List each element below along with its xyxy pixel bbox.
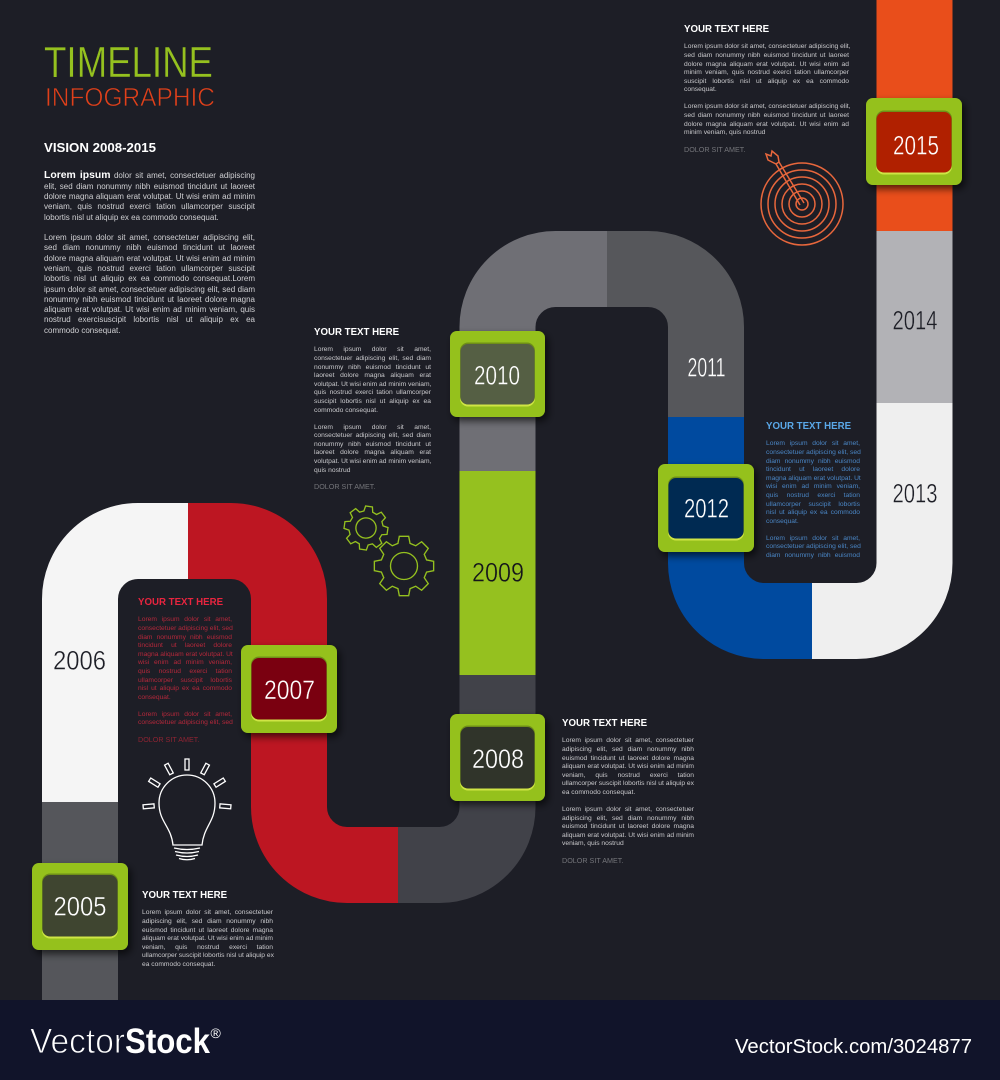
text block 2012: tincidunt ut laoreet dolore <box>766 466 860 473</box>
text block 2015: YOUR TEXT HERE <box>684 24 769 35</box>
segment 2009 <box>460 471 536 675</box>
text block 2008 <box>562 718 694 865</box>
text block 2005: ullamcorper suscipit lobortis nisl ut aliquip ex <box>142 952 274 959</box>
text block 2007: consequat. <box>138 694 171 701</box>
text block 2012: nisl ut aliquip ex ea commodo <box>766 509 860 516</box>
logo: registered mark: ® <box>210 1025 222 1041</box>
text block 2015: sed diam nonummy nibh euismod tincidunt ut laoreet <box>684 52 849 59</box>
text block 2010: DOLOR SIT AMET. <box>314 482 375 491</box>
text block 2007: wisi enim ad minim veniam, <box>138 659 232 666</box>
text block 2007 <box>138 597 233 744</box>
segment 2013 <box>812 403 914 621</box>
road year labels <box>53 306 938 676</box>
text block 2005: YOUR TEXT HERE <box>142 890 227 901</box>
text block 2012: wisi enim ad minim veniam, <box>766 483 860 490</box>
segment 2007 <box>188 541 398 865</box>
subtitle: VISION 2008-2015 <box>44 141 156 155</box>
intro text block: lobortis nisl ut aliquip ex ea commodo consequat.Lorem <box>44 274 255 283</box>
text block 2012: YOUR TEXT HERE <box>766 421 851 432</box>
text block 2015: minim veniam, quis nostrud <box>684 129 765 136</box>
text block 2007: nisl ut aliquip ex ea commodo <box>138 685 232 692</box>
segment 2008 <box>398 675 498 865</box>
intro text block <box>44 170 255 335</box>
text block 2010: nonummy nibh euismod tincidunt ut <box>314 364 431 371</box>
text block 2010: quis nostrud exerci tation ullamcorper <box>314 389 431 396</box>
text block 2005: Lorem ipsum dolor sit amet, consectetuer <box>142 909 273 916</box>
text block 2008: Lorem ipsum dolor sit amet, consectetuer <box>562 806 694 813</box>
segment 2015 <box>876 0 952 231</box>
text block 2005: veniam, quis nostrud exerci tation <box>142 944 273 951</box>
text block 2015: dolore magna aliquam erat volutpat. Ut wisi enim ad <box>684 61 849 68</box>
segment 2012 <box>706 417 812 621</box>
text block 2008: aliquam erat volutpat. Ut wisi enim ad minim <box>562 763 694 770</box>
year 2006: 2006 <box>53 646 106 676</box>
title line: timeline: TIMELINE <box>44 38 213 87</box>
text block 2012: quis nostrud exerci tation <box>766 492 860 499</box>
text block 2008: adipiscing elit, sed diam nonummy nibh <box>562 815 694 822</box>
year 2014: 2014 <box>892 306 938 336</box>
text block 2012: ullamcorper suscipit lobortis <box>766 501 860 508</box>
segment 2006 <box>80 541 188 802</box>
intro text block: nostrud exercisuscipit lobortis nisl ut aliquip ex ea <box>44 315 255 324</box>
text block 2015: minim veniam, quis nostrud exerci tation ullamcorper <box>684 69 849 76</box>
text block 2015: Lorem ipsum dolor sit amet, consectetuer adipiscing elit, <box>684 43 851 50</box>
text block 2015: consequat. <box>684 86 717 93</box>
text block 2012: consectetuer adipiscing elit, sed <box>766 449 861 456</box>
text block 2007: tincidunt ut laoreet dolore <box>138 642 232 649</box>
intro text block: sed diam nonummy nibh euismod tincidunt ut laoreet <box>44 243 255 252</box>
text block 2008: ea commodo consequat. <box>562 789 635 796</box>
text block 2012: magna aliquam erat volutpat. Ut <box>766 475 861 482</box>
badge 2008: 2008 <box>472 744 524 774</box>
intro text block: lobortis nisl ut aliquip ex ea commodo consequat. <box>44 213 219 222</box>
text block 2008: aliquam erat volutpat. Ut wisi enim ad minim <box>562 832 694 839</box>
icon: gears <box>341 503 434 596</box>
icon: light bulb <box>143 759 231 860</box>
segment 2011 <box>607 269 706 417</box>
text block 2010: suscipit lobortis nisl ut aliquip ex ea <box>314 398 431 405</box>
badge 2010 <box>450 331 545 417</box>
segment 2010 <box>498 269 607 471</box>
badge 2012 <box>658 464 754 552</box>
text block 2007: diam nonummy nibh euismod <box>138 634 232 641</box>
text block 2015: DOLOR SIT AMET. <box>684 145 745 154</box>
text block 2007: Lorem ipsum dolor sit amet, <box>138 616 232 623</box>
logo: vector: Vector <box>30 1022 125 1061</box>
text block 2010: Lorem ipsum dolor sit amet, <box>314 424 431 431</box>
text block 2012: Lorem ipsum dolor sit amet, <box>766 440 860 447</box>
footer url: VectorStock.com/3024877 <box>735 1036 972 1058</box>
logo: stock: Stock <box>125 1022 210 1061</box>
text block 2007: ullamcorper suscipit lobortis <box>138 677 232 684</box>
text block 2010: laoreet dolore magna aliquam erat <box>314 449 431 456</box>
badge 2005: 2005 <box>54 892 106 922</box>
intro text block: dolore magna aliquam erat volutpat. Ut wisi enim ad minim <box>44 192 255 201</box>
text block 2008: YOUR TEXT HERE <box>562 718 647 729</box>
intro text block: veniam, quis nostrud exerci tation ullamcorper suscipit <box>44 264 255 273</box>
intro text block: ipsum dolor sit amet, consectetuer adipiscing elit, sed diam <box>44 284 255 294</box>
text block 2010: Lorem ipsum dolor sit amet, <box>314 346 431 353</box>
badge 2012: 2012 <box>684 494 729 524</box>
title line: infographic: INFOGRAPHIC <box>45 82 215 112</box>
text block 2015: dolore magna aliquam erat volutpat. Ut wisi enim ad <box>684 121 849 128</box>
winding road <box>80 0 914 1000</box>
text block 2008: veniam, quis nostrud exerci tation <box>562 772 694 779</box>
segment 2014 <box>876 231 952 403</box>
year 2009: 2009 <box>472 558 524 588</box>
text block 2007: quis nostrud exerci tation <box>138 668 232 675</box>
intro text block: commodo consequat. <box>44 326 120 335</box>
text block 2005 <box>142 890 274 968</box>
text block 2010: laoreet dolore magna aliquam erat <box>314 372 431 379</box>
intro text block: elit, sed diam nonummy nibh euismod tincidunt ut laoreet <box>44 182 255 191</box>
text block 2015: sed diam nonummy nibh euismod tincidunt ut laoreet <box>684 112 849 119</box>
year 2011: 2011 <box>688 352 726 382</box>
text block 2007: magna aliquam erat volutpat. Ut <box>138 651 233 658</box>
text block 2010: volutpat. Ut wisi enim ad minim veniam, <box>314 381 431 388</box>
intro text block: dolore magna aliquam erat volutpat. Ut wisi enim ad minim <box>44 254 255 263</box>
text block 2012: diam nonummy nibh euismod <box>766 552 860 559</box>
badge 2007 <box>241 645 337 733</box>
intro text block: Lorem ipsum dolor sit amet, consectetuer adipiscing elit, <box>44 233 255 242</box>
footer band <box>0 1000 1000 1080</box>
text block 2015: Lorem ipsum dolor sit amet, consectetuer adipiscing elit, <box>684 103 851 110</box>
text block 2010: consectetuer adipiscing elit, sed diam <box>314 432 431 439</box>
text block 2008: euismod tincidunt ut laoreet dolore magna <box>562 755 694 762</box>
title <box>44 38 215 112</box>
text block 2015: suscipit lobortis nisl ut aliquip ex ea commodo <box>684 78 849 85</box>
intro text block: veniam, quis nostrud exerci tation ullamcorper suscipit <box>44 202 255 211</box>
text block 2007: consectetuer adipiscing elit, sed <box>138 625 233 632</box>
text block 2005: aliquam erat volutpat. Ut wisi enim ad minim <box>142 935 273 942</box>
intro text block: nonummy nibh euismod tincidunt ut laoreet dolore magna <box>44 295 255 304</box>
text block 2007: consectetuer adipiscing elit, sed <box>138 719 233 726</box>
text block 2010: nonummy nibh euismod tincidunt ut <box>314 441 431 448</box>
text block 2005: ea commodo consequat. <box>142 961 215 968</box>
text block 2010: quis nostrud <box>314 466 350 474</box>
footer logo <box>30 1022 222 1061</box>
segment 2005 <box>42 802 118 1000</box>
text block 2007: YOUR TEXT HERE <box>138 597 223 608</box>
text block 2012 <box>766 421 861 559</box>
text block 2005: euismod tincidunt ut laoreet dolore magna <box>142 927 273 934</box>
text block 2012: consectetuer adipiscing elit, sed <box>766 543 861 550</box>
text block 2012: consequat. <box>766 518 799 525</box>
badge 2007: 2007 <box>264 675 315 705</box>
text block 2008: DOLOR SIT AMET. <box>562 856 623 865</box>
text block 2008: veniam, quis nostrud <box>562 840 624 847</box>
text block 2008: Lorem ipsum dolor sit amet, consectetuer <box>562 737 694 744</box>
text block 2010: YOUR TEXT HERE <box>314 327 399 338</box>
text block 2008: adipiscing elit, sed diam nonummy nibh <box>562 746 694 753</box>
text block 2007: Lorem ipsum dolor sit amet, <box>138 711 232 718</box>
intro text block: aliquam erat volutpat. Ut wisi enim ad minim veniam, quis <box>44 305 255 314</box>
text block 2010: volutpat. Ut wisi enim ad minim veniam, <box>314 458 431 465</box>
text block 2007: DOLOR SIT AMET. <box>138 735 199 744</box>
text block 2012: Lorem ipsum dolor sit amet, <box>766 535 860 542</box>
year 2013: 2013 <box>892 478 938 508</box>
badge 2015 <box>866 98 962 185</box>
text block 2015 <box>684 24 851 154</box>
text block 2005: adipiscing elit, sed diam nonummy nibh <box>142 918 273 925</box>
icon: target <box>761 151 843 245</box>
intro text block: Lorem ipsum dolor sit amet, consectetuer adipiscing <box>44 170 255 181</box>
text block 2008: ullamcorper suscipit lobortis nisl ut aliquip ex <box>562 780 694 787</box>
badge 2008 <box>450 714 545 801</box>
text block 2012: diam nonummy nibh euismod <box>766 458 860 465</box>
badge 2005 <box>32 863 128 950</box>
badge 2010: 2010 <box>474 360 520 390</box>
text block 2010: commodo consequat. <box>314 407 378 414</box>
text block 2010: consectetuer adipiscing elit, sed diam <box>314 355 431 362</box>
badge 2015: 2015 <box>893 130 939 160</box>
text block 2010 <box>314 327 431 491</box>
text block 2008: euismod tincidunt ut laoreet dolore magna <box>562 823 694 830</box>
